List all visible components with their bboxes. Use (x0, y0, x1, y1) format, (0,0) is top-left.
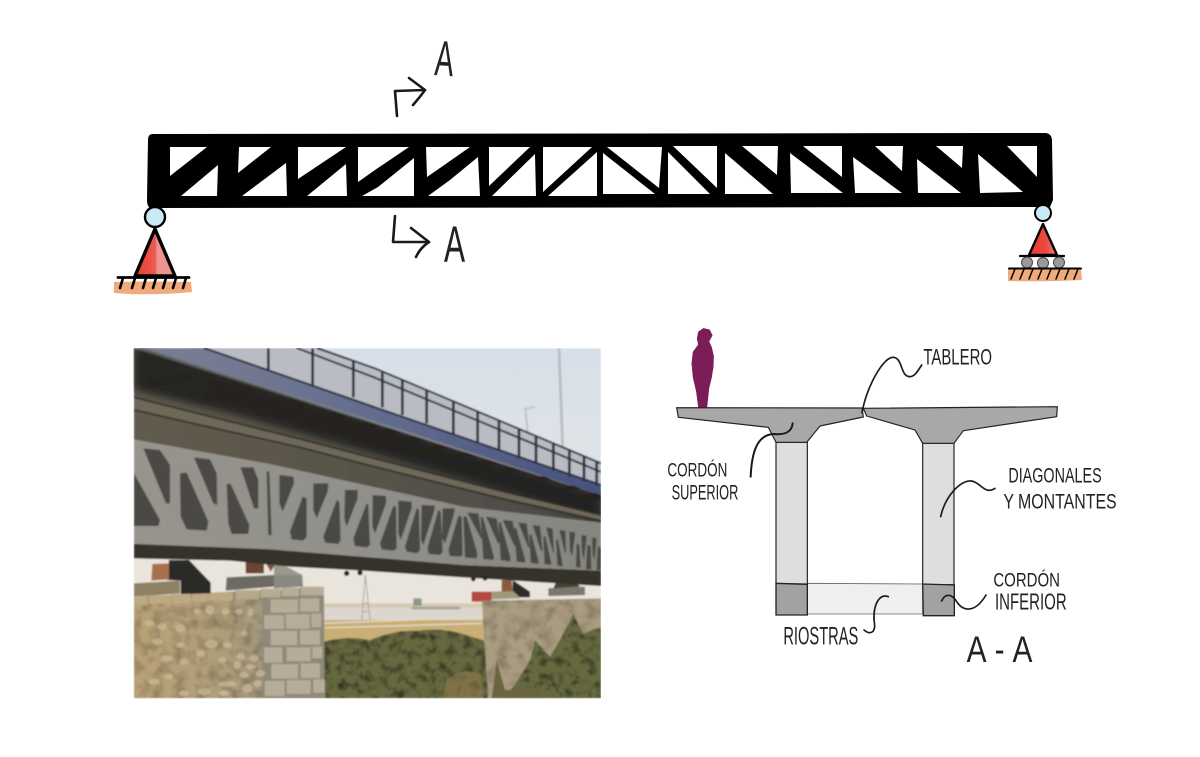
photo: concrete truss bridge seen from below (134, 345, 601, 698)
underside of deck (134, 348, 601, 524)
section letter: lower A: A (444, 216, 466, 273)
distant ground and buildings (322, 575, 492, 643)
web openings (134, 448, 601, 570)
photo sky (134, 348, 601, 615)
label: diagonales y montantes (1003, 463, 1117, 514)
right stone pier (482, 598, 601, 698)
pinned support, left (114, 207, 192, 294)
label: diagonales y montantes: DIAGONALES (1008, 463, 1102, 487)
bracing between chords (807, 583, 923, 614)
section mark: lower arrow (393, 216, 429, 257)
section title: A - A: A - A (967, 629, 1033, 671)
roller support, right (1008, 205, 1082, 281)
pier masonry (134, 587, 325, 698)
label: cordón inferior: INFERIOR (995, 588, 1067, 614)
label: cordón superior: SUPERIOR (672, 480, 738, 504)
lamp posts (524, 348, 563, 448)
right web (923, 443, 954, 585)
far bearings (492, 577, 585, 599)
truss beam elevation (147, 133, 1053, 208)
cross section A-A drawing (667, 329, 1117, 671)
vegetation (323, 629, 492, 698)
truss web, light concrete (134, 439, 601, 571)
label: diagonales y montantes: Y MONTANTES (1003, 490, 1117, 514)
label: cordón superior (667, 459, 738, 504)
flange bolts (344, 570, 487, 581)
bearings and plinths (134, 558, 304, 598)
right bottom chord (923, 584, 954, 616)
person scale figure (692, 329, 713, 407)
deck cross beams (257, 400, 601, 500)
left bottom chord (776, 583, 807, 615)
pipe along the beam (134, 397, 601, 521)
leader lines (751, 357, 995, 633)
deck fascia (147, 348, 601, 495)
deck shadow band (134, 345, 601, 522)
dry reeds base, right (492, 660, 547, 698)
left web (776, 442, 807, 584)
label: tablero: TABLERO (923, 344, 992, 369)
dry reeds (443, 671, 484, 698)
label: cordón inferior: CORDÓN (993, 569, 1060, 592)
label: cordón inferior (993, 569, 1067, 614)
label: cordón superior: CORDÓN (667, 459, 727, 482)
right-hand plants (503, 613, 601, 698)
section letter: upper A: A (433, 29, 456, 87)
railing mesh (204, 348, 601, 485)
bottom flange (134, 543, 601, 586)
left deck T-beam (677, 408, 863, 442)
left stone pier (134, 587, 325, 698)
right deck T-beam (863, 407, 1057, 443)
section mark: upper arrow (395, 78, 425, 116)
label: riostras: RIOSTRAS (783, 623, 858, 651)
railing rails and posts (204, 348, 601, 485)
